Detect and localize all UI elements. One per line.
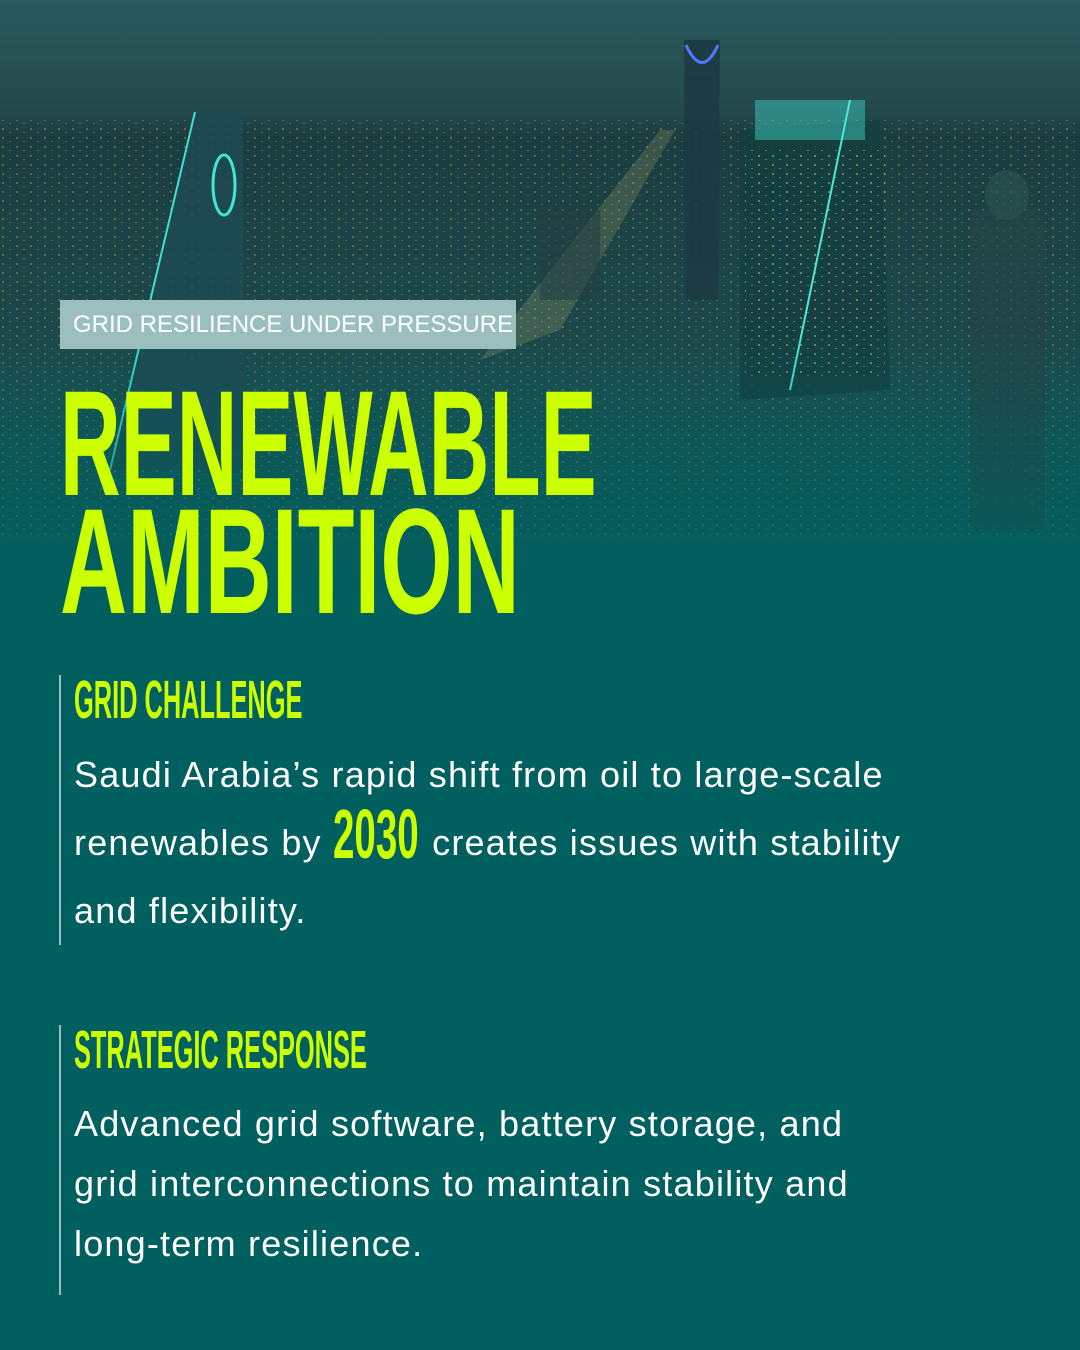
heading: grid challenge: GRID CHALLENGE	[74, 670, 302, 730]
body text: 2030	[333, 795, 419, 873]
tag: grid resilience under pressure: GRID RESILIENCE UNDER PRESSURE	[73, 311, 513, 338]
title: RENEWABLE	[60, 359, 597, 527]
right glass building	[740, 100, 890, 400]
title	[60, 359, 597, 645]
Kingdom tower	[684, 40, 720, 300]
title: AMBITION	[60, 477, 520, 645]
body text: and flexibility.	[74, 890, 307, 931]
body text: Saudi Arabia’s rapid shift from oil to large-scale	[74, 754, 884, 795]
body text: long-term resilience.	[74, 1223, 423, 1264]
body text	[74, 754, 901, 931]
right clocktower	[970, 170, 1045, 530]
heading: strategic response: STRATEGIC RESPONSE	[74, 1020, 367, 1080]
body text	[74, 1103, 849, 1264]
panel: grid challenge	[59, 670, 901, 945]
body text: Advanced grid software, battery storage, and	[74, 1103, 843, 1144]
tag: grid resilience under pressure	[60, 300, 516, 349]
left tower	[110, 112, 243, 470]
body text: grid interconnections to maintain stability and	[74, 1163, 849, 1204]
body text: renewables by creates issues with stability	[74, 822, 901, 863]
panel: strategic response	[59, 1020, 849, 1295]
background: city skyline photo	[0, 0, 1080, 538]
avenue glow	[480, 130, 675, 360]
